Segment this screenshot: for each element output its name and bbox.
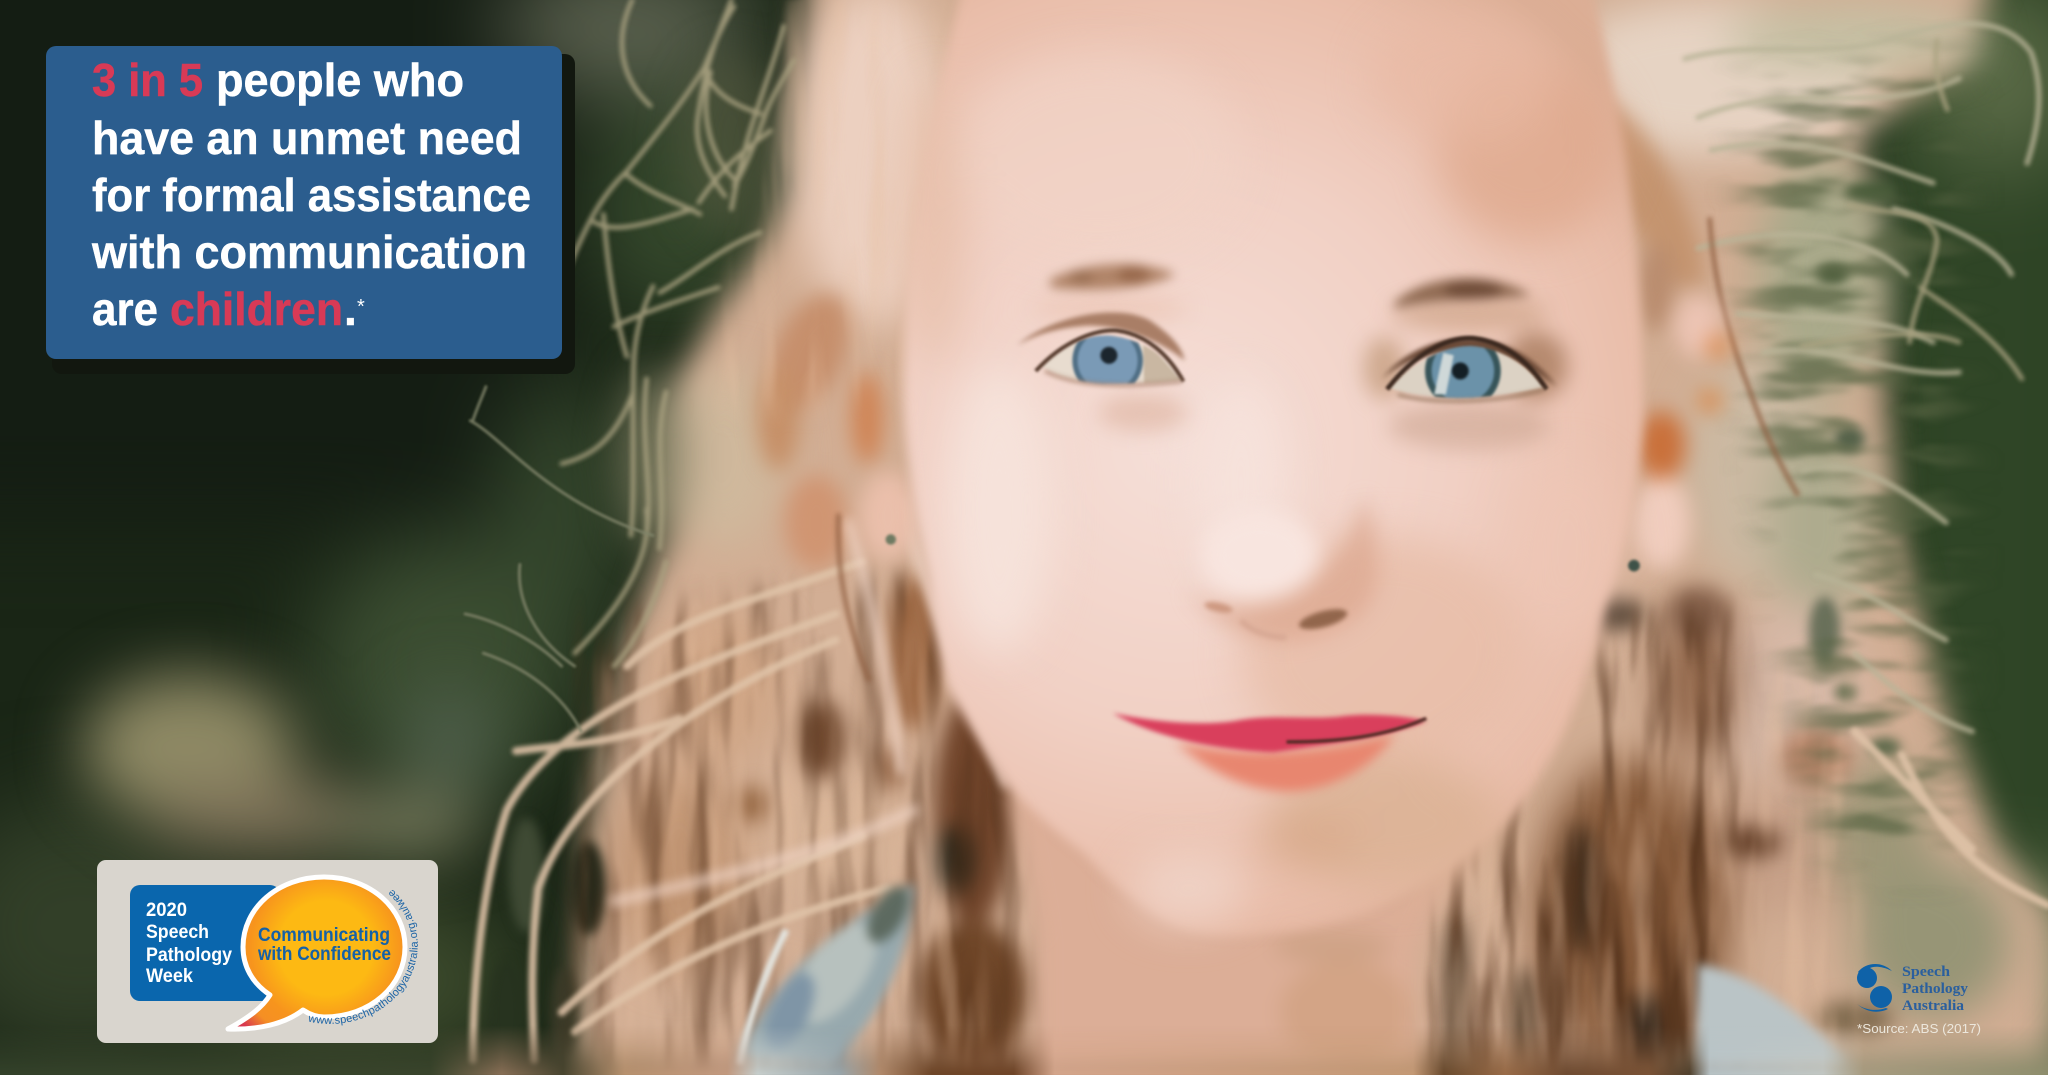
blue label: event name: 2020 xyxy=(146,900,187,921)
neck xyxy=(1008,784,1528,1065)
heading text: 3 in 5 statistic: are xyxy=(92,283,158,335)
face xyxy=(886,0,1643,936)
right eye xyxy=(1382,333,1557,409)
curved website address xyxy=(308,890,418,1026)
right eyebrow xyxy=(1395,278,1531,308)
logo: Speech Pathology Australia: Australia xyxy=(1902,998,1965,1014)
panel: statistic callout xyxy=(46,46,562,359)
curved website address: www.speechpathologyaustralia.org.au/week xyxy=(308,890,418,1026)
panel shadow xyxy=(52,54,575,374)
logo: Speech Pathology Australia: Speech xyxy=(1902,964,1951,980)
left eyebrow xyxy=(1050,264,1176,290)
heading text: 3 in 5 statistic: children xyxy=(170,283,343,335)
logo mark: swirl xyxy=(1857,964,1892,1012)
earrings xyxy=(886,534,1640,571)
heading text: 3 in 5 statistic: have an unmet need xyxy=(92,112,522,164)
blue label: event name: Speech xyxy=(146,922,209,943)
heading text: 3 in 5 statistic: 3 in 5 xyxy=(92,54,203,106)
blue label: event name xyxy=(130,885,280,1001)
lips xyxy=(1113,713,1426,792)
hair mass xyxy=(488,0,2048,1075)
heading text: 3 in 5 statistic: people who xyxy=(216,54,464,106)
heading text: 3 in 5 statistic: with communication xyxy=(91,226,527,278)
blue label: event name: Pathology xyxy=(146,945,232,966)
speech bubble: Communicating with Confidence: with Confidence xyxy=(257,944,391,965)
bottom edge tones of the photo xyxy=(0,1025,2048,1075)
blue label: event name: Week xyxy=(146,966,193,987)
heading text: 3 in 5 statistic: . xyxy=(344,283,357,335)
speech bubble: Communicating with Confidence: Communicating xyxy=(258,925,390,946)
source note: *Source: ABS (2017) xyxy=(1857,1021,1981,1036)
logo: Speech Pathology Australia xyxy=(1857,964,1969,1014)
ears xyxy=(859,295,1729,570)
forehead and cheek shading xyxy=(903,13,1626,925)
dark gaps between lower left locks xyxy=(488,183,1900,1068)
heading text: 3 in 5 statistic: for formal assistance xyxy=(92,169,531,221)
speech bubble: Communicating with Confidence xyxy=(228,877,405,1029)
badge: 2020 Speech Pathology Week xyxy=(97,860,438,1043)
logo: Speech Pathology Australia: Pathology xyxy=(1902,981,1969,997)
heading text: 3 in 5 statistic xyxy=(91,54,531,335)
flyaway hair strands xyxy=(465,0,2048,1061)
nose xyxy=(1186,496,1378,640)
heading text: 3 in 5 statistic: * xyxy=(357,296,365,318)
denim jacket collars xyxy=(739,879,1848,1065)
left eye xyxy=(1017,312,1185,396)
eye sockets xyxy=(1032,295,1567,449)
streak textures xyxy=(575,575,1032,1075)
